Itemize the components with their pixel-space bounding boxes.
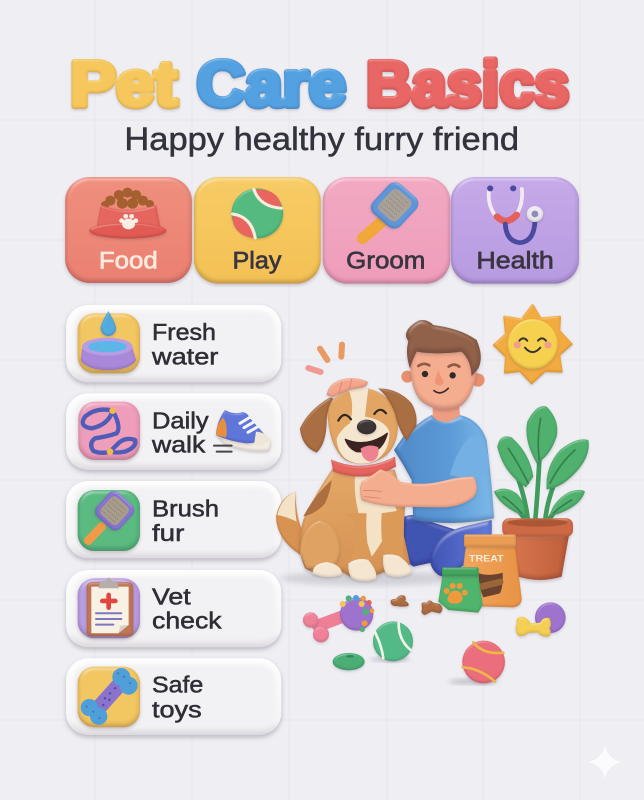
icon: water bowl [78, 311, 140, 373]
row: vet check [66, 570, 281, 647]
icon: brush [363, 179, 422, 238]
illustration: dog and owner [276, 305, 589, 586]
text: brush fur: Brush [152, 496, 219, 522]
tennis ball [370, 621, 413, 662]
treat bag [459, 534, 522, 607]
icon: shoe [214, 410, 271, 452]
eyes [338, 410, 386, 421]
hair [406, 320, 481, 376]
title [70, 48, 569, 120]
label: food: Food [99, 248, 158, 274]
yellow bone [516, 617, 551, 637]
category cards [65, 177, 579, 284]
sleeve [450, 436, 489, 482]
text: daily walk [151, 407, 209, 457]
neck [433, 398, 460, 422]
title: Care [197, 48, 346, 120]
arm [360, 469, 477, 507]
icon: ball [231, 188, 283, 238]
mouth [345, 433, 387, 452]
icon: food bowl [89, 188, 166, 239]
body [300, 465, 410, 577]
row: daily walk [66, 393, 281, 470]
torso [394, 415, 494, 523]
green ring [333, 653, 365, 670]
toys and treats [303, 534, 566, 685]
red ball [448, 641, 505, 685]
label: health: Health [476, 248, 554, 274]
icon: leash [78, 402, 140, 460]
purple ball [535, 602, 566, 633]
text: vet check: Vet [152, 583, 191, 609]
icon: clipboard [78, 578, 140, 638]
text: safe toys: Safe [152, 672, 203, 698]
text: daily walk: walk [151, 431, 206, 457]
owner hands [327, 378, 489, 507]
text: fresh water: water [151, 343, 219, 369]
text: fresh water [151, 319, 219, 369]
icon: brush [78, 488, 140, 551]
row: brush fur [66, 481, 281, 558]
text: brush fur: fur [152, 520, 185, 546]
pink bone rattle [303, 595, 374, 642]
plant [494, 406, 589, 580]
green bag [438, 567, 483, 613]
tail [276, 492, 305, 555]
card: health [451, 177, 579, 284]
checklist [66, 305, 281, 735]
face [418, 364, 459, 393]
treat bag: TREAT [469, 554, 504, 564]
title: Pet [70, 48, 177, 120]
ears [300, 397, 333, 453]
muzzle [337, 417, 389, 464]
paws [313, 554, 412, 581]
text: brush fur [152, 496, 219, 546]
row: fresh water [66, 305, 281, 382]
nose [357, 420, 376, 434]
card: play [194, 177, 321, 284]
tongue [361, 446, 379, 462]
text: vet check: check [152, 607, 222, 633]
collar [331, 457, 396, 476]
sparkle watermark [588, 745, 622, 779]
subtitle: Happy healthy furry friend [124, 121, 519, 157]
kibble [391, 595, 442, 615]
icon: bone toy [78, 667, 140, 727]
haunch [300, 520, 340, 568]
head [410, 343, 477, 410]
label: play: Play [233, 248, 281, 274]
blaze [348, 387, 368, 423]
icon: stethoscope [487, 185, 543, 243]
title: Basics [366, 48, 569, 120]
card: groom [323, 177, 450, 284]
text: daily walk: Daily [152, 407, 209, 433]
card: food [65, 177, 192, 283]
chest [355, 477, 397, 557]
text: fresh water: Fresh [152, 319, 216, 345]
dog [276, 387, 417, 581]
fingers [338, 379, 382, 498]
sparks [308, 345, 342, 372]
row: safe toys [66, 658, 281, 735]
text: safe toys: toys [152, 697, 202, 723]
front leg [342, 513, 370, 563]
ears [401, 371, 413, 383]
legs [403, 515, 492, 576]
owner [394, 320, 494, 576]
hand on head [327, 378, 368, 397]
text: vet check [152, 583, 222, 633]
text: safe toys [152, 672, 203, 723]
label: groom: Groom [346, 248, 425, 274]
floor shadow [280, 571, 460, 586]
sun [494, 305, 572, 383]
head [327, 387, 398, 464]
